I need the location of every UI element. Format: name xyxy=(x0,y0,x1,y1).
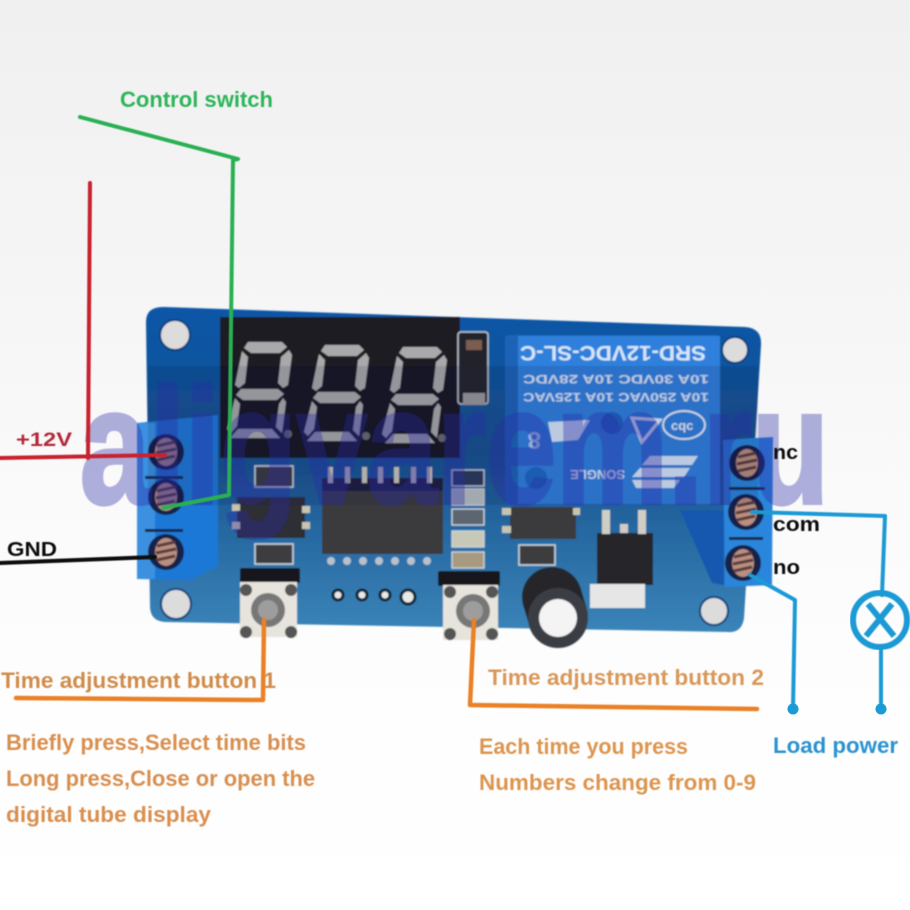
text block: button 1 instructions xyxy=(6,730,315,827)
header pads xyxy=(333,590,415,604)
icon: lamp xyxy=(853,593,907,647)
label: GND: GND xyxy=(7,539,57,561)
blue wire: no to load power xyxy=(750,575,795,708)
text block: button 2 instructions: Numbers change from 0-9 xyxy=(479,770,756,795)
text block: button 2 instructions xyxy=(479,734,756,795)
label: Control switch: Control switch xyxy=(120,87,273,112)
orange wire: button 1 xyxy=(16,620,264,700)
relay: 10A 30VDC 10A 28VDC xyxy=(523,372,709,386)
small SMD parts xyxy=(255,466,555,565)
orange wire: button 2 xyxy=(470,620,757,709)
circuit board xyxy=(146,307,761,632)
terminal block left xyxy=(137,415,218,580)
wires xyxy=(0,117,885,709)
relay xyxy=(505,335,720,505)
darker watermark band xyxy=(148,366,758,505)
text block: button 1 instructions: Briefly press,Select time bits xyxy=(6,730,306,755)
green wire: control switch xyxy=(80,117,238,508)
relay: 8 xyxy=(528,426,541,453)
label: nc: nc xyxy=(773,442,798,464)
indicator component xyxy=(458,332,488,405)
electrolytic capacitor xyxy=(528,588,588,648)
text block: button 1 instructions: Long press,Close or open the xyxy=(6,766,315,791)
label: Time adjustment button 2: Time adjustment button 2 xyxy=(488,665,764,690)
blue wire: com to lamp xyxy=(752,512,885,708)
optocoupler left xyxy=(232,497,310,538)
label: +12V: +12V xyxy=(16,430,72,451)
label: Time adjustment button 1: Time adjustment button 1 xyxy=(1,668,276,693)
mounting holes xyxy=(160,320,748,625)
label: Load power: Load power xyxy=(773,733,898,758)
seven-segment display xyxy=(220,317,460,458)
text block: button 2 instructions: Each time you press xyxy=(479,734,688,759)
optocoupler right xyxy=(502,507,580,539)
relay: SONGLE xyxy=(570,467,625,482)
panel: relay module board xyxy=(137,307,773,648)
LED column xyxy=(452,470,484,568)
red wire: +12V xyxy=(0,183,165,458)
black wire: GND xyxy=(0,557,155,563)
microcontroller chip xyxy=(322,467,443,565)
voltage regulator xyxy=(590,510,653,608)
label: no: no xyxy=(773,557,800,579)
button 1 xyxy=(240,568,300,638)
relay: 10A 250VAC 10A 125VAC xyxy=(523,390,709,404)
relay: SRD-12VDC-SL-C xyxy=(520,341,706,364)
label: com: com xyxy=(773,514,820,536)
terminal block right xyxy=(680,437,773,587)
load power terminals xyxy=(788,704,886,714)
text block: button 1 instructions: digital tube display xyxy=(6,802,212,827)
button 2 xyxy=(438,571,500,640)
relay: cqc xyxy=(671,418,693,433)
